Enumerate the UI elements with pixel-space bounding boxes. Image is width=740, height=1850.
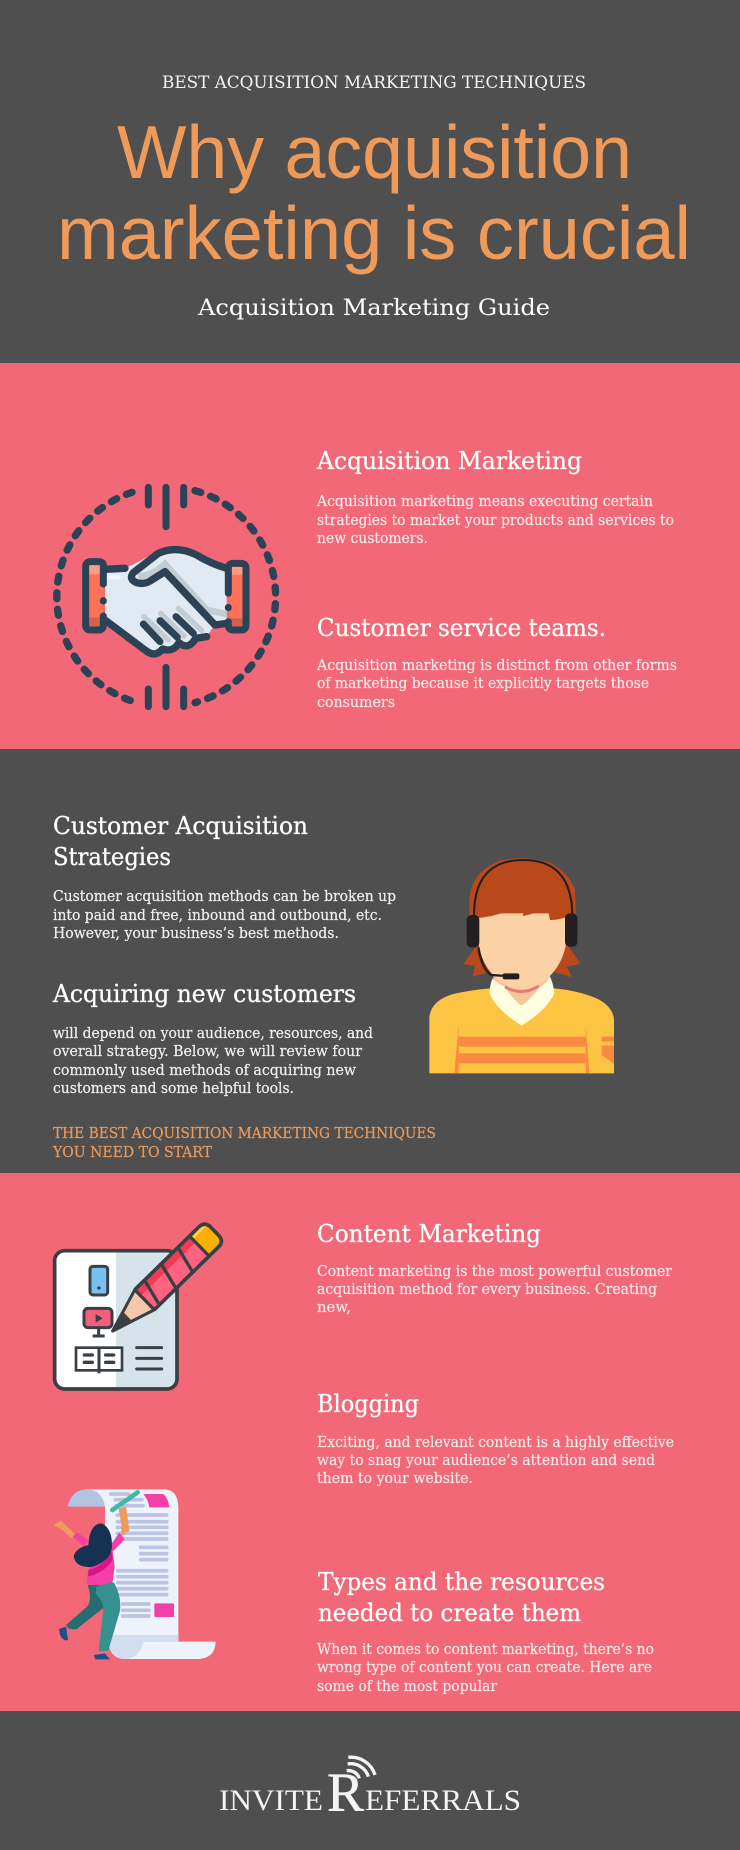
callout: best techniques: [52, 1126, 436, 1161]
text: strategies body: However, your business’s best methods.: [53, 926, 339, 942]
text: types body: some of the most popular: [317, 1679, 497, 1695]
text: customer service body: [316, 658, 677, 711]
panel: header: [0, 0, 740, 363]
logo: Invite Referrals: [219, 1757, 521, 1823]
heading: types and resources: needed to create them: [318, 1599, 581, 1627]
title: marketing is crucial: [57, 191, 691, 275]
subtitle: Acquisition Marketing Guide: [197, 296, 550, 321]
heading: blogging: Blogging: [317, 1390, 419, 1418]
panel: content marketing: [0, 1173, 740, 1711]
heading: acquisition marketing: Acquisition Marketing: [316, 447, 582, 475]
icon: content page and pencil: [55, 1221, 224, 1389]
panel: footer: [0, 1711, 740, 1850]
icon: signal arcs: [347, 1757, 375, 1778]
text: acquisition marketing body: new customers.: [317, 531, 428, 547]
icon: support agent with headset: [429, 858, 614, 1073]
heading: types and resources: [318, 1568, 605, 1627]
text: customer service body: consumers: [317, 695, 395, 711]
text: blogging body: way to snag your audience’s attention and send: [317, 1453, 655, 1469]
heading: customer acquisition strategies: Strategies: [53, 843, 171, 871]
text: acquiring body: customers and some helpful tools.: [53, 1081, 294, 1097]
logo: Invite Referrals: INVITE: [219, 1784, 323, 1817]
logo: Invite Referrals: EFERRALS: [365, 1784, 521, 1817]
heading: acquiring new customers: Acquiring new customers: [52, 980, 356, 1008]
text: types body: wrong type of content you can create. Here are: [317, 1660, 652, 1676]
kicker: BEST ACQUISITION MARKETING TECHNIQUES: [162, 73, 586, 92]
text: acquiring body: overall strategy. Below, we will review four: [53, 1044, 362, 1060]
text: content marketing body: acquisition method for every business. Creating: [317, 1282, 657, 1298]
text: customer service body: of marketing because it explicitly targets those: [317, 676, 649, 692]
heading: types and resources: Types and the resources: [318, 1568, 605, 1596]
callout: best techniques: THE BEST ACQUISITION MARKETING TECHNIQUES: [53, 1126, 436, 1142]
text: acquiring body: commonly used methods of acquiring new: [53, 1063, 357, 1079]
text: content marketing body: Content marketing is the most powerful customer: [317, 1264, 672, 1280]
panel: acquisition marketing: [0, 363, 740, 749]
heading: content marketing: Content Marketing: [317, 1220, 541, 1248]
text: blogging body: Exciting, and relevant content is a highly effective: [317, 1435, 674, 1451]
text: acquisition marketing body: [316, 494, 674, 547]
text: blogging body: them to your website.: [317, 1471, 473, 1487]
text: acquisition marketing body: strategies to market your products and services to: [317, 513, 674, 529]
text: blogging body: [317, 1435, 674, 1487]
text: customer service body: Acquisition marketing is distinct from other forms: [316, 658, 677, 674]
text: types body: [317, 1642, 654, 1695]
text: content marketing body: [317, 1264, 672, 1316]
title: Why acquisition: [117, 110, 632, 194]
icon: woman writing on scroll: [53, 1489, 216, 1659]
panel: customer acquisition strategies: [0, 749, 740, 1173]
text: acquiring body: [53, 1026, 373, 1097]
text: strategies body: [53, 889, 396, 942]
callout: best techniques: YOU NEED TO START: [52, 1145, 212, 1161]
text: acquisition marketing body: Acquisition marketing means executing certain: [316, 494, 653, 510]
icon: handshake: [57, 487, 276, 707]
text: strategies body: Customer acquisition methods can be broken up: [53, 889, 396, 905]
heading: customer acquisition strategies: [53, 812, 308, 871]
title: [57, 110, 691, 275]
heading: customer service teams: Customer service teams.: [317, 614, 606, 642]
pencil: [103, 1221, 224, 1341]
text: acquiring body: will depend on your audience, resources, and: [53, 1026, 373, 1042]
logo: Invite Referrals: R: [327, 1762, 364, 1823]
text: strategies body: into paid and free, inbound and outbound, etc.: [53, 908, 382, 924]
heading: customer acquisition strategies: Customer Acquisition: [53, 812, 308, 840]
text: content marketing body: new,: [317, 1300, 351, 1316]
text: types body: When it comes to content marketing, there’s no: [317, 1642, 654, 1658]
